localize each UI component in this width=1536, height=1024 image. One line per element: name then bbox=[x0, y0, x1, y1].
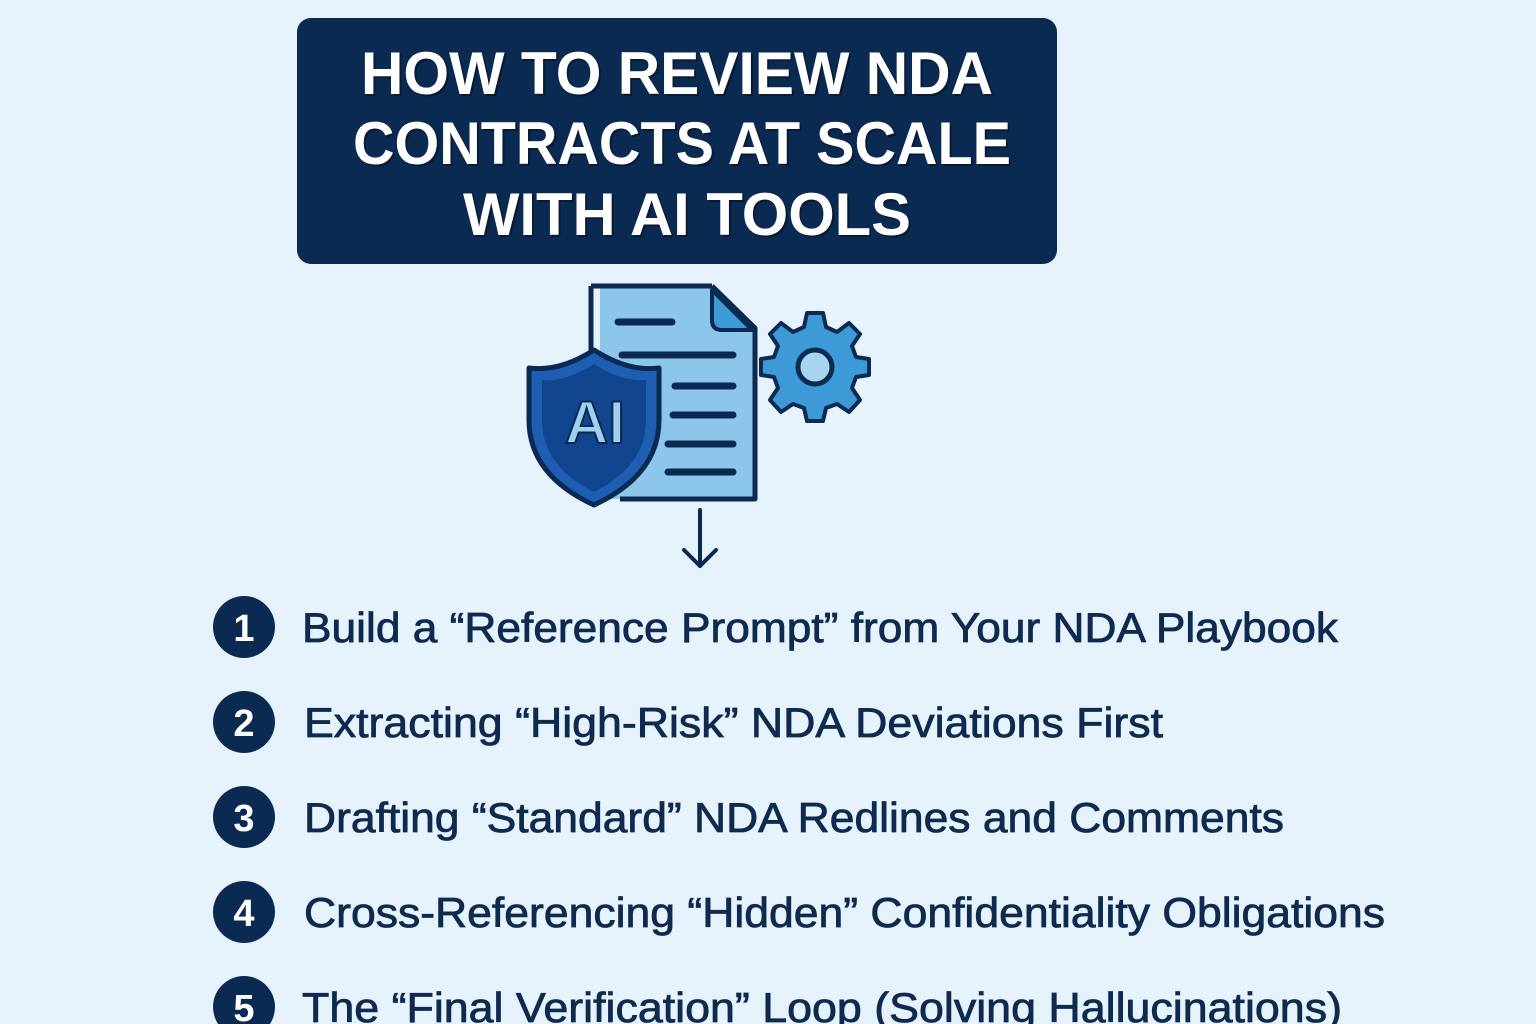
step 3 bbox=[213, 786, 1284, 848]
step 1 bbox=[213, 596, 1339, 658]
icon: gear bbox=[761, 313, 869, 421]
icon: AI document with shield and gear bbox=[529, 286, 869, 505]
title: CONTRACTS AT SCALE bbox=[355, 112, 1013, 179]
title bbox=[297, 18, 1057, 264]
icon: shield AI: AI bbox=[565, 389, 625, 456]
title: HOW TO REVIEW NDA bbox=[363, 42, 995, 109]
step 1: 1 bbox=[233, 608, 255, 650]
icon: document bbox=[591, 286, 755, 499]
icon: shield AI bbox=[529, 350, 659, 505]
step 2 bbox=[213, 691, 1163, 753]
list of steps bbox=[213, 596, 1385, 1024]
step 4: 4 bbox=[233, 893, 255, 935]
step 4 bbox=[213, 881, 1385, 943]
title: CONTRACTS AT SCALE bbox=[353, 110, 1011, 177]
step 2: 2 bbox=[233, 703, 255, 745]
step 2: Extracting “High-Risk” NDA Deviations First bbox=[304, 699, 1163, 746]
step 4: Cross-Referencing “Hidden” Confidentiality Obligations bbox=[304, 889, 1385, 936]
step 3: Drafting “Standard” NDA Redlines and Comments bbox=[304, 794, 1284, 841]
title: WITH AI TOOLS bbox=[463, 181, 911, 248]
step 1: Build a “Reference Prompt” from Your NDA Playbook bbox=[302, 604, 1339, 651]
title: WITH AI TOOLS bbox=[465, 183, 913, 250]
step 3: 3 bbox=[233, 798, 255, 840]
arrow bbox=[684, 510, 716, 566]
title: HOW TO REVIEW NDA bbox=[361, 40, 993, 107]
